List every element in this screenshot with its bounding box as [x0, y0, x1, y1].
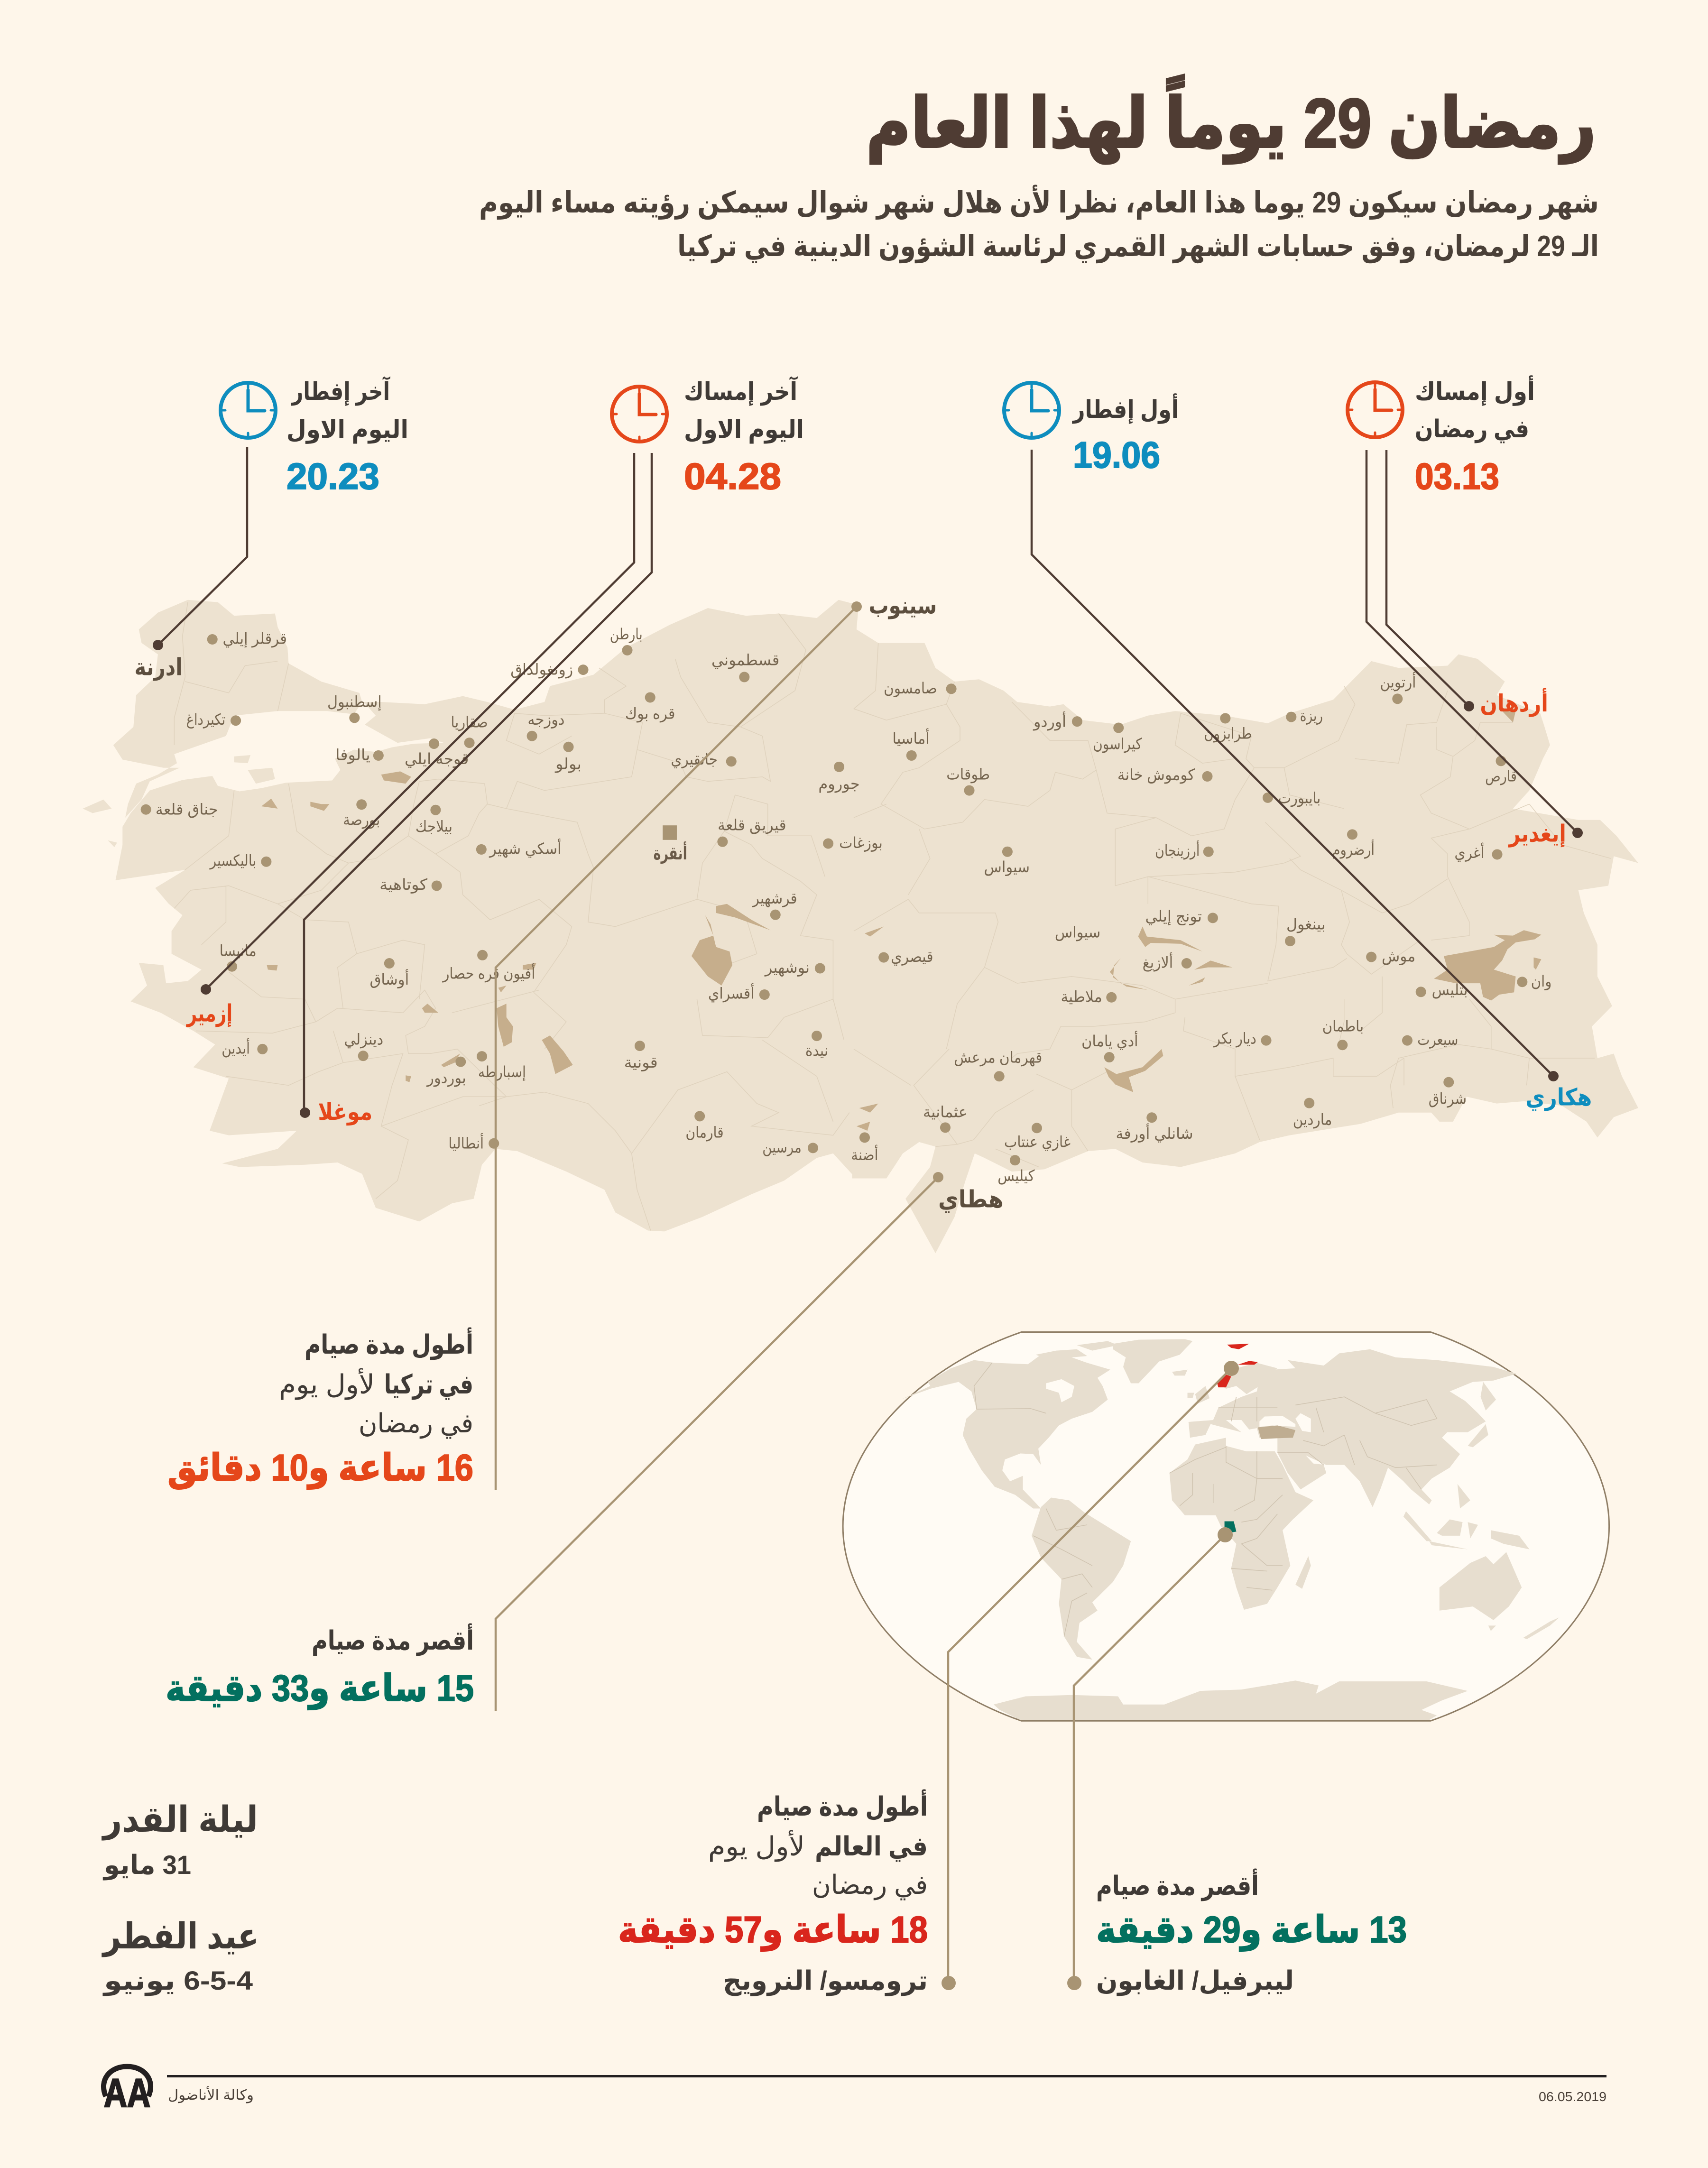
- province: Bolu: بولو: [554, 755, 582, 773]
- province: Bursa: [343, 799, 380, 829]
- label: Mugla: موغلا: [318, 1098, 372, 1126]
- province: Siirt: سيعرت: [1417, 1031, 1458, 1049]
- panel: last iftar first day: [221, 376, 408, 497]
- arrow: Tromso: [942, 1361, 1239, 1990]
- province: Burdur: [426, 1057, 466, 1087]
- Norway highlight: [1217, 1344, 1258, 1387]
- province: Kars: [1485, 756, 1517, 785]
- province: Malatya: ملاطية: [1061, 987, 1102, 1006]
- label: Ardahan: أردهان: [1480, 688, 1548, 717]
- province: Konya: [624, 1041, 658, 1071]
- date heading: عيد الفطر: [102, 1916, 259, 1957]
- province: Kirsehir: قرشهير: [752, 889, 797, 907]
- province: Yozgat: بوزغات: [839, 834, 883, 852]
- heading text: آخر إمساك: [684, 376, 798, 406]
- province: Sivas: [984, 847, 1030, 876]
- world map: [843, 1332, 1609, 1721]
- heading text: آخر إفطار: [291, 376, 390, 406]
- province: Gaziantep: [1004, 1123, 1071, 1151]
- heading text: [1415, 375, 1535, 443]
- time: 20.23: [286, 455, 379, 497]
- heading text: [684, 376, 804, 444]
- province: Cankiri: جانقيري: [671, 750, 718, 768]
- date value: 6-5-4 يونيو: [102, 1965, 253, 1996]
- block: Eid al-Fitr: [102, 1916, 259, 1996]
- capital: Ankara: [654, 825, 687, 864]
- panel: last imsak first day: [612, 376, 804, 497]
- label: Hakkari: هكاري: [1525, 1084, 1592, 1111]
- province: Bursa: بورصة: [343, 811, 380, 829]
- province: Sivas: سيواس: [984, 858, 1030, 876]
- province: Kirklareli: [207, 630, 287, 648]
- province: Adiyaman: [1081, 1031, 1138, 1062]
- province: Mersin: مرسين: [762, 1138, 802, 1156]
- province: Ordu: أوردو: [1033, 711, 1066, 731]
- province: Bolu: [554, 742, 582, 773]
- callout line 3: في رمضان: [812, 1870, 928, 1900]
- map labels: eastern provinces: [851, 592, 1592, 1213]
- province: Bartin: بارطن: [610, 625, 643, 643]
- province: Mardin: [1293, 1098, 1332, 1129]
- callout value: 16 ساعة و10 دقائق: [167, 1447, 473, 1489]
- province: Erzurum: أرضروم: [1332, 840, 1375, 859]
- province: Rize: ريزة: [1300, 707, 1323, 725]
- province: Duzce: دوزجه: [527, 710, 564, 729]
- province: Mus: موش: [1382, 947, 1415, 965]
- province: Diyarbakir: ديار بكر: [1213, 1029, 1256, 1047]
- block: Laylat al-Qadr: [101, 1799, 258, 1881]
- province: Aydin: أيدين: [222, 1038, 250, 1058]
- capital: Ankara: أنقرة: [654, 841, 687, 864]
- province: Mardin: ماردين: [1293, 1111, 1332, 1129]
- callout heading: أقصر مدة صيام: [1096, 1868, 1259, 1901]
- continents: [902, 1339, 1559, 1720]
- intro text: الـ 29 لرمضان، وفق حسابات الشهر القمري لرئاسة الشؤون الدينية في تركيا: [677, 230, 1599, 263]
- province: Kocaeli: قوجه ايلي: [405, 750, 469, 768]
- callout heading: أقصر مدة صيام: [312, 1623, 474, 1656]
- province: Kilis: [997, 1155, 1035, 1185]
- province: Aksaray: أقسراي: [708, 983, 755, 1003]
- province: Bingol: بينغول: [1286, 915, 1326, 933]
- province: Bitlis: بتليس: [1432, 981, 1468, 999]
- province: Kilis: كيليس: [997, 1167, 1035, 1185]
- province: Karabuk: قره بوك: [625, 705, 675, 723]
- province: Kirikkale: قيريق قلعة: [718, 816, 786, 834]
- province: Samsun: صامسون: [884, 679, 937, 697]
- province: Kastamonu: قسطموني: [711, 651, 779, 669]
- agency name: وكالة الأناضول: [168, 2085, 254, 2103]
- heading text: [286, 376, 408, 444]
- province: Tokat: [946, 766, 990, 796]
- province: Afyonkarahisar: [442, 950, 535, 983]
- province: Artvin: [1380, 672, 1416, 704]
- callout line 2: [708, 1830, 928, 1862]
- province: Bayburt: بايبورت: [1278, 789, 1320, 807]
- province: Kutahya: كوتاهية: [379, 876, 428, 894]
- arrow: Hakkari: [1032, 450, 1559, 1081]
- arrow: Izmir: [201, 453, 634, 995]
- province: Erzincan: أرزينجان: [1155, 840, 1200, 859]
- province: Kocaeli: [405, 738, 469, 768]
- callout line 2: لأول يوم: [708, 1830, 805, 1862]
- province: Trabzon: [1204, 713, 1252, 743]
- callout value: 18 ساعة و57 دقيقة: [618, 1909, 928, 1951]
- arrow: Libreville: [1067, 1527, 1233, 1990]
- arrow: Sinop to longest fast: [496, 601, 862, 1490]
- province: Batman: باطمان: [1322, 1017, 1364, 1035]
- province: Sirnak: [1429, 1077, 1467, 1108]
- title: رمضان 29 يوماً لهذا العام: [866, 74, 1596, 164]
- province: Corum: [818, 762, 860, 793]
- icon: orange clock: [612, 387, 667, 442]
- province: Nevsehir: نوشهير: [764, 959, 810, 977]
- callout: longest fast in the world: [618, 1789, 928, 1996]
- callout line 2: في تركيا: [384, 1369, 473, 1400]
- heading text: اليوم الاول: [684, 416, 804, 444]
- province: Sanliurfa: [1116, 1112, 1193, 1143]
- province: Manisa: [220, 942, 257, 972]
- province: Amasya: أماسيا: [893, 728, 930, 747]
- province: Sakarya: [451, 713, 488, 748]
- province: Manisa: مانيسا: [220, 942, 257, 959]
- province: Kahramanmaras: قهرمان مرعش: [954, 1049, 1042, 1067]
- time: 04.28: [684, 455, 781, 497]
- province: Corum: جوروم: [818, 775, 860, 793]
- province: Canakkale: جناق قلعة: [156, 800, 218, 818]
- map east half: land: [852, 604, 1638, 1253]
- province: Batman: [1322, 1017, 1364, 1050]
- province: Karabuk: [625, 692, 675, 723]
- province: Sirnak: شرناق: [1429, 1090, 1467, 1108]
- province: Afyonkarahisar: أفيون قره حصار: [442, 963, 535, 983]
- province: Nigde: [805, 1031, 828, 1059]
- province: Yalova: يالوفا: [335, 746, 370, 764]
- province: Isparta: إسبارطه: [478, 1063, 526, 1081]
- province: Bitlis: [1416, 981, 1468, 999]
- province: Rize: [1286, 707, 1323, 725]
- province: Tekirdag: تكيرداغ: [186, 710, 225, 729]
- province: Van: [1517, 972, 1551, 990]
- province: Istanbul: إسطنبول: [327, 693, 382, 711]
- callout line 3: في رمضان: [359, 1408, 473, 1439]
- province: Eskisehir: أسكي شهير: [489, 839, 562, 858]
- Turkey highlight: [1258, 1425, 1295, 1439]
- heading text: أول إفطار: [1071, 393, 1179, 424]
- province: Amasya: [893, 728, 930, 761]
- province: Bilecik: [415, 805, 452, 835]
- province: Gaziantep: غازي عنتاب: [1004, 1133, 1071, 1151]
- label: Igdir: إيغدير: [1508, 820, 1566, 848]
- callout heading: أطول مدة صيام: [305, 1327, 473, 1360]
- map: Turkey: [83, 592, 1638, 1253]
- province: Nigde: نيدة: [805, 1042, 828, 1059]
- province: Isparta: [477, 1051, 526, 1081]
- province: Mus: [1366, 947, 1415, 965]
- icon: orange clock: [1348, 382, 1403, 437]
- callout: shortest fast in Turkey: [166, 1623, 474, 1710]
- map west half: land: [83, 600, 856, 1231]
- footer: [103, 2067, 1606, 2115]
- province: Denizli: دينزلي: [344, 1030, 383, 1048]
- callout place: ليبرفيل/ الغابون: [1096, 1965, 1294, 1996]
- callout heading: أطول مدة صيام: [757, 1789, 928, 1822]
- province: Zonguldak: زونغولداق: [510, 661, 573, 679]
- label: Edirne: ادرنة: [135, 654, 183, 681]
- panel: first imsak: [1348, 375, 1535, 497]
- leader lines: clocks to Turkish cities: [153, 447, 1583, 1990]
- province: Konya: قونية: [624, 1053, 658, 1071]
- province: Tunceli: تونج إيلي: [1145, 907, 1202, 925]
- province: Kahramanmaras: [954, 1049, 1042, 1081]
- province: Antalya: أنطاليا: [448, 1133, 484, 1152]
- label: Izmir: إزمير: [186, 1000, 232, 1027]
- province: Eskisehir: [476, 839, 562, 858]
- time: 03.13: [1415, 455, 1499, 497]
- callout: shortest fast in the world: [1096, 1868, 1407, 1996]
- callout line 2: [279, 1368, 473, 1400]
- intro text: شهر رمضان سيكون 29 يوما هذا العام، نظرا لأن هلال شهر شوال سيمكن رؤيته مساء اليوم: [479, 185, 1599, 220]
- map frame: [843, 1332, 1609, 1721]
- province: Elazig: ألازيغ: [1143, 952, 1173, 972]
- province: Van: وان: [1531, 972, 1551, 990]
- panel: first iftar: [1004, 383, 1179, 476]
- province: Kastamonu: [711, 651, 779, 682]
- province: Bilecik: بيلاجك: [415, 818, 452, 835]
- intro text: [479, 185, 1599, 263]
- province: Adana: أضنة: [851, 1145, 878, 1163]
- province: Duzce: [527, 710, 564, 741]
- arrow: Edirne: [153, 447, 247, 650]
- icon: blue clock: [221, 383, 276, 438]
- heading text: في رمضان: [1415, 415, 1529, 443]
- map labels: western provinces: [135, 625, 883, 1156]
- callout line 2: لأول يوم: [279, 1368, 375, 1400]
- province: Bingol: [1285, 915, 1326, 946]
- callout place: ترومسو/ النرويج: [723, 1965, 928, 1996]
- province: Denizli: [344, 1030, 383, 1061]
- date value: 31 مايو: [102, 1850, 191, 1881]
- footer rule: [167, 2075, 1606, 2077]
- province: Artvin: أرتوين: [1380, 672, 1416, 692]
- date: 06.05.2019: [1539, 2089, 1606, 2104]
- province: Kayseri: [878, 948, 933, 966]
- callout value: 13 ساعة و29 دقيقة: [1096, 1909, 1407, 1951]
- province: Istanbul: [327, 693, 382, 723]
- icon: blue clock: [1004, 383, 1059, 438]
- borders: [974, 1363, 1437, 1636]
- heading text: أول إمساك: [1415, 375, 1535, 406]
- callout line 2: في العالم: [815, 1831, 928, 1862]
- logo: Anadolu Agency: AA: [104, 2071, 150, 2115]
- province: Sanliurfa: شانلي أورفة: [1116, 1124, 1193, 1143]
- province: Osmaniye: عثمانية: [923, 1103, 968, 1121]
- arrow: Hatay to shortest fast: [496, 1172, 943, 1711]
- province: Bayburt: [1263, 789, 1320, 807]
- province: Adiyaman: أدي يامان: [1081, 1031, 1138, 1050]
- province: Canakkale: [141, 800, 218, 818]
- province: Bartin: [610, 625, 643, 655]
- province: Usak: [369, 958, 409, 988]
- callout value: 15 ساعة و33 دقيقة: [166, 1667, 474, 1710]
- province: Kirsehir: [752, 889, 797, 920]
- time: 19.06: [1073, 434, 1160, 476]
- province: Erzurum: [1332, 829, 1375, 859]
- province: Kirikkale: [717, 816, 786, 847]
- province: Osmaniye: [923, 1103, 968, 1133]
- seas: [1046, 1379, 1326, 1465]
- arrow: Ardahan: [1386, 450, 1474, 711]
- province: Kayseri: قيصري: [891, 948, 933, 966]
- date heading: ليلة القدر: [101, 1799, 258, 1841]
- province: Trabzon: طرابزون: [1204, 725, 1252, 743]
- province: Karaman: [685, 1111, 724, 1142]
- label: Sinop: سينوب: [869, 592, 937, 619]
- province: Giresun: [1093, 723, 1142, 753]
- province: Giresun: كيراسون: [1093, 735, 1142, 753]
- province: Agri: أغري: [1454, 843, 1485, 862]
- province: Usak: أوشاق: [369, 969, 409, 988]
- province: Gumushane: كوموش خانة: [1117, 766, 1195, 784]
- province: Karaman: قارمان: [685, 1123, 724, 1142]
- province: Tokat: طوقات: [946, 766, 990, 784]
- province: Siirt: [1402, 1031, 1458, 1049]
- province: Balikesir: باليكسير: [209, 851, 256, 870]
- province: Kirklareli: قرقلر إيلي: [223, 630, 287, 648]
- heading text: اليوم الاول: [286, 416, 408, 444]
- province: Burdur: بوردور: [426, 1069, 466, 1087]
- label: Hatay: هطاي: [938, 1186, 1004, 1213]
- region name: Sivas second label: سيواس: [1055, 923, 1100, 941]
- province: Yozgat: [823, 834, 883, 852]
- province: Kars: قارص: [1485, 767, 1517, 785]
- arrow: Igdir: [1366, 450, 1583, 838]
- province: Adana: [851, 1132, 878, 1163]
- arrow: Mugla: [300, 453, 652, 1118]
- province: Sakarya: صقاريا: [451, 713, 488, 731]
- Gabon highlight: [1225, 1521, 1237, 1533]
- callout: longest fast in Turkey: [167, 1327, 473, 1489]
